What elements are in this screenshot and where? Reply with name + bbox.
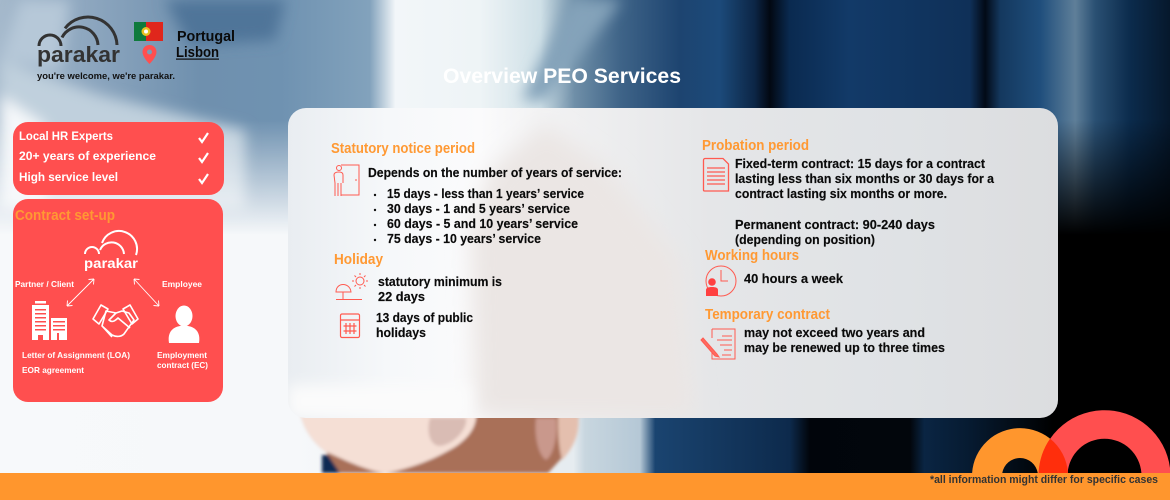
arrow: client to parakar <box>67 279 94 306</box>
section: working hours: 40 hours a week <box>744 272 843 286</box>
notice period list: 30 days - 1 and 5 years’ service <box>387 202 570 216</box>
notice period list <box>374 187 584 246</box>
icon: door with person <box>334 165 359 196</box>
icon: Portugal flag <box>134 22 163 41</box>
icon: contract and pen <box>701 329 735 359</box>
logo: white parakar <box>84 231 139 271</box>
label: EOR agreement: EOR agreement <box>22 365 84 375</box>
section: holiday: holidays <box>376 326 426 340</box>
notice period list: 75 days - 10 years’ service <box>387 232 541 246</box>
icon: check marks <box>199 133 208 183</box>
bottom orange band <box>0 473 1170 500</box>
panel: benefits: High service level <box>19 172 118 184</box>
section: temporary contract <box>701 307 945 359</box>
section: working hours: Working hours <box>705 248 799 264</box>
section: probation period: Permanent contract: 90-240 days <box>735 218 935 232</box>
section: probation period: contract lasting six months or more. <box>735 187 947 201</box>
section: holiday <box>334 252 502 340</box>
label: employment contract: Employment <box>157 350 207 360</box>
location labels: Lisbon <box>176 45 219 61</box>
footnote: *all information might differ for specific cases <box>930 474 1158 486</box>
handshake skin tones <box>300 417 580 473</box>
icon: person <box>169 306 199 343</box>
section: temporary contract: Temporary contract <box>705 307 830 323</box>
section: statutory notice period <box>331 141 622 246</box>
section: working hours <box>705 248 843 296</box>
location labels: Portugal <box>177 29 235 45</box>
panel: contract set-up <box>13 199 223 402</box>
section: probation period: Fixed-term contract: 15 days for a contract <box>735 157 986 171</box>
label: employment contract <box>157 350 208 370</box>
section: holiday: 13 days of public <box>376 311 473 325</box>
logo: parakar: parakar <box>37 42 120 67</box>
section: statutory notice period: Depends on the number of years of service: <box>368 166 622 180</box>
logo: parakar <box>37 17 175 82</box>
label: partner / client: Partner / Client <box>15 279 74 289</box>
label: employee: Employee <box>162 279 202 289</box>
icon: document <box>704 158 728 191</box>
icon: beach umbrella and sun <box>336 273 368 300</box>
notice period list: 60 days - 5 and 10 years’ service <box>387 217 578 231</box>
main translucent panel <box>288 108 1058 418</box>
label: letter of assignment: Letter of Assignment (LOA) <box>22 350 130 360</box>
section: temporary contract: may be renewed up to three times <box>744 341 945 355</box>
icon: handshake <box>93 305 138 337</box>
panel: benefits: Local HR Experts <box>19 131 113 143</box>
decorative arcs <box>972 410 1170 473</box>
logo: white parakar: parakar <box>84 255 139 271</box>
section: holiday: statutory minimum is <box>378 275 502 289</box>
section: holiday: Holiday <box>334 252 383 268</box>
icon: calendar <box>340 314 360 338</box>
icon: location pin <box>142 45 156 64</box>
icon: clock with person <box>706 266 736 296</box>
location labels <box>176 29 235 61</box>
panel: benefits: 20+ years of experience <box>19 151 156 163</box>
label: employment contract: contract (EC) <box>157 360 208 370</box>
panel: contract set-up: Contract set-up <box>15 208 115 224</box>
section: statutory notice period: Statutory notice period <box>331 141 475 157</box>
title: Overview PEO Services <box>443 64 681 88</box>
notice period list: 15 days - less than 1 years’ service <box>387 187 584 201</box>
section: probation period <box>702 138 995 247</box>
icon: office buildings <box>32 301 67 340</box>
arrow: parakar to employee <box>134 279 159 306</box>
section: probation period: (depending on position) <box>735 233 875 247</box>
logo: parakar: you're welcome, we're parakar. <box>37 71 175 82</box>
panel: benefits <box>13 122 224 195</box>
section: probation period: Probation period <box>702 138 809 154</box>
section: holiday: 22 days <box>378 290 425 304</box>
section: probation period: lasting less than six months or 30 days for a <box>735 172 995 186</box>
section: temporary contract: may not exceed two years and <box>744 326 925 340</box>
